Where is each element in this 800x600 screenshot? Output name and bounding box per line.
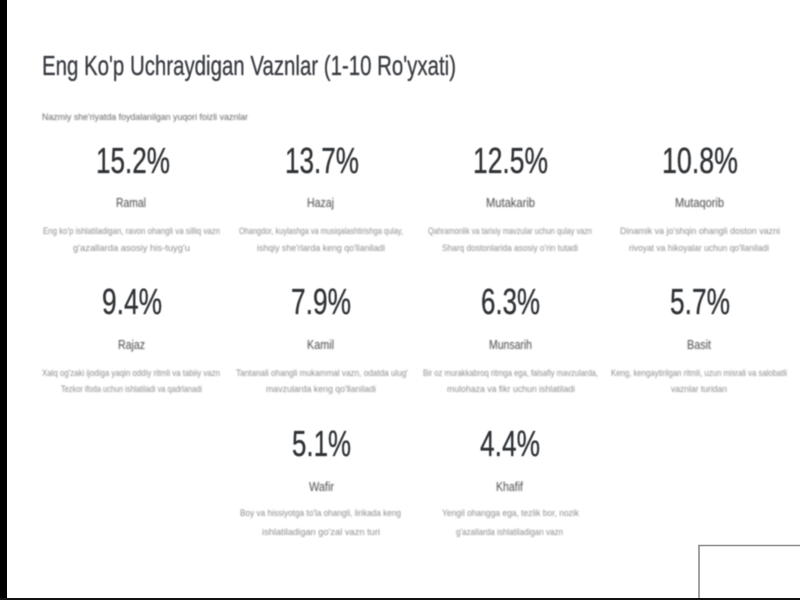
percentage: 5.1%: [292, 423, 351, 464]
card: Mutakarib 12.5%: [428, 140, 592, 254]
subtitle: Nazmiy she'riyatda foydalanilgan yuqori foizli vaznlar: [42, 112, 248, 123]
description: ishlatiladigan go'zal vazn turi: [262, 527, 380, 538]
name: Rajaz: [118, 337, 145, 352]
percentage: 5.7%: [670, 281, 730, 322]
title: Eng Ko'p Uchraydigan Vaznlar (1-10 Ro'yxati): [42, 50, 456, 81]
card: Ramal 15.2%: [43, 140, 220, 254]
percentage: 12.5%: [473, 140, 548, 181]
description: Sharq dostonlarida asosiy o'rin tutadi: [442, 243, 578, 254]
percentage: 6.3%: [481, 281, 540, 322]
empty outlined box at bottom right: [699, 546, 800, 598]
description: g'azallarda asosiy his-tuyg'u: [73, 243, 190, 254]
card: Mutaqorib 10.8%: [620, 140, 780, 254]
description: ishqiy she'rlarda keng qo'llaniladi: [257, 243, 385, 254]
description: rivoyat va hikoyalar uchun qo'llaniladi: [629, 243, 769, 254]
name: Munsarih: [489, 337, 532, 352]
card: Hazaj 13.7%: [239, 140, 403, 254]
description: Tantanali ohangli mukammal vazn, odatda ulug': [236, 368, 408, 379]
name: Khafif: [496, 479, 523, 494]
description: Eng ko'p ishlatiladigan, ravon ohangli va silliq vazn: [43, 226, 220, 237]
description: mavzularda keng qo'llaniladi: [266, 384, 376, 395]
name: Mutakarib: [486, 195, 535, 210]
description: Qahramonlik va tarixiy mavzular uchun qulay vazn: [428, 226, 592, 237]
percentage: 15.2%: [96, 140, 170, 181]
name: Ramal: [116, 195, 146, 210]
name: Wafir: [309, 479, 335, 494]
percentage: 10.8%: [662, 140, 738, 181]
description: [620, 226, 780, 254]
left black edge bar: [0, 0, 7, 600]
percentage: 4.4%: [480, 423, 540, 464]
description: [239, 226, 403, 254]
description: Yengil ohangga ega, tezlik bor, nozik: [442, 508, 579, 519]
description: [423, 368, 598, 395]
percentage: 7.9%: [291, 281, 351, 322]
description: Boy va hissiyotga to'la ohangli, lirikada keng: [240, 508, 401, 519]
card: Khafif 4.4%: [442, 423, 579, 538]
card: Kamil 7.9%: [236, 281, 408, 395]
percentage: 13.7%: [285, 140, 359, 181]
description: [442, 508, 579, 538]
name: Basit: [687, 337, 711, 352]
card: Rajaz 9.4%: [42, 281, 220, 395]
card: Munsarih 6.3%: [423, 281, 598, 395]
description: [43, 226, 220, 254]
description: Xalq og'zaki ijodiga yaqin oddiy ritmli va tabiiy vazn: [42, 368, 220, 379]
description: Dinamik va jo'shqin ohangli doston vazni: [620, 226, 780, 237]
description: [240, 508, 401, 538]
description: mulohaza va fikr uchun ishlatiladi: [447, 384, 575, 395]
description: [428, 226, 592, 254]
name: Kamil: [307, 337, 334, 352]
card: Basit 5.7%: [611, 281, 787, 395]
name: Hazaj: [307, 195, 334, 210]
description: Ohangdor, kuylashga va musiqalashtirishga qulay,: [239, 226, 403, 237]
description: [236, 368, 408, 395]
description: [611, 368, 787, 395]
percentage: 9.4%: [102, 281, 162, 322]
description: vaznlar turidan: [671, 384, 727, 395]
description: Tezkor ifoda uchun ishlatiladi va qadrlanadi: [61, 384, 202, 395]
bottom black edge line: [0, 598, 800, 600]
description: g'azallarda ishlatiladigan vazn: [456, 527, 563, 538]
name: Mutaqorib: [675, 195, 724, 210]
card: Wafir 5.1%: [240, 423, 401, 538]
description: [42, 368, 220, 395]
description: Bir oz murakkabroq ritmga ega, falsafiy mavzularda,: [423, 368, 598, 379]
